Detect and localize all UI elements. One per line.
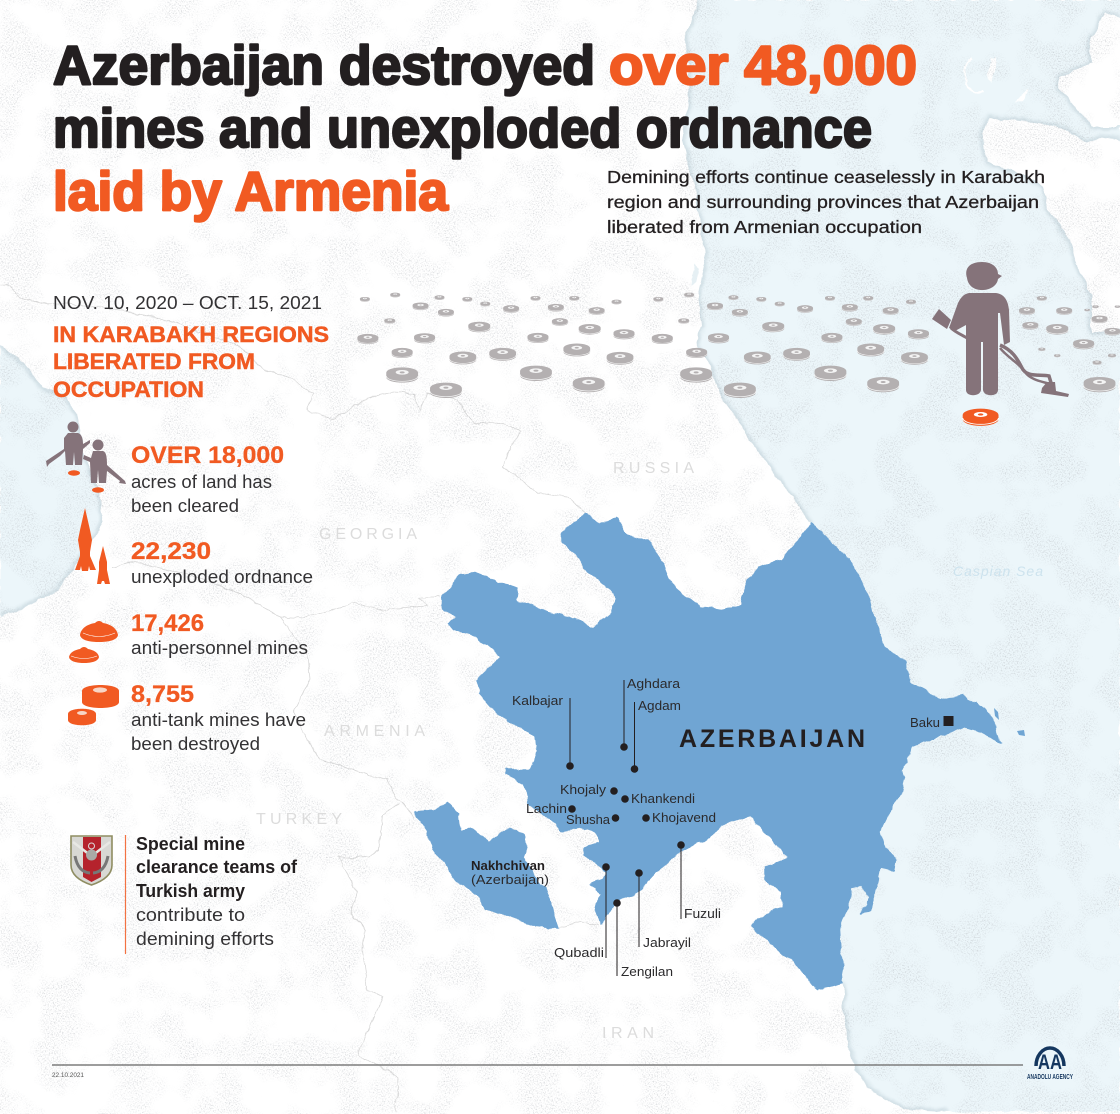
logo: Anadolu Agency xyxy=(1027,1048,1073,1081)
date range: NOV. 10, 2020 – OCT. 15, 2021 xyxy=(53,293,322,313)
country label: Georgia: GEORGIA xyxy=(319,526,417,543)
stat: land cleared: OVER 18,000 xyxy=(131,442,284,469)
stat: anti-personnel mines: anti-personnel mines xyxy=(131,638,308,658)
map label: Nakhchivan: (Azerbaijan) xyxy=(471,872,549,887)
city marker: Zengilan xyxy=(613,899,673,979)
city marker: Aghdara: Aghdara xyxy=(627,676,681,691)
title: laid by Armenia xyxy=(53,160,448,222)
date stamp: 22.10.2021 xyxy=(52,1072,84,1079)
city marker: Jabrayil: Jabrayil xyxy=(643,935,691,950)
map label: Nakhchivan xyxy=(471,858,549,887)
country label: Turkey: TURKEY xyxy=(256,811,342,828)
city marker: Khojavend: Khojavend xyxy=(652,810,716,825)
city marker: Agdam: Agdam xyxy=(638,698,681,713)
stat: unexploded ordnance: unexploded ordnance xyxy=(131,567,313,587)
section heading: OCCUPATION xyxy=(53,377,204,402)
text block: Turkish mine clearance teams: Turkish army xyxy=(136,881,245,901)
stat: anti-tank mines: anti-tank mines have xyxy=(131,710,306,730)
sea label: Caspian Sea: Caspian Sea xyxy=(953,563,1043,579)
icon: deminer with metal detector xyxy=(932,262,1069,397)
stat: land cleared xyxy=(131,442,284,516)
stat: unexploded ordnance xyxy=(131,538,313,587)
city marker: Shusha: Shusha xyxy=(566,812,611,827)
stat: anti-tank mines: 8,755 xyxy=(131,681,194,708)
map label: Nakhchivan: Nakhchivan xyxy=(471,858,545,873)
title: over 48,000 xyxy=(609,34,917,96)
icon: two deminers xyxy=(46,422,126,493)
icon: orange mine under detector xyxy=(963,409,999,426)
city marker: Fuzuli: Fuzuli xyxy=(684,906,721,921)
text block: Turkish mine clearance teams: Special mine xyxy=(136,834,245,854)
stat: anti-personnel mines: 17,426 xyxy=(131,610,204,637)
city marker: Zengilan: Zengilan xyxy=(621,964,673,979)
city marker: Kalbajar xyxy=(512,693,574,770)
text block: Turkish mine clearance teams: demining efforts xyxy=(136,929,274,949)
city marker: Lachin: Lachin xyxy=(526,801,567,816)
stat: unexploded ordnance: 22,230 xyxy=(131,538,211,565)
footer rule xyxy=(52,1064,1023,1066)
icon: anti-personnel mines xyxy=(69,621,118,663)
divider: orange rule xyxy=(124,835,126,954)
country label: Armenia: ARMENIA xyxy=(324,723,425,740)
city marker: Jabrayil xyxy=(635,869,691,950)
stat: land cleared: acres of land has xyxy=(131,472,272,492)
city marker: Kalbajar: Kalbajar xyxy=(512,693,564,708)
logo: Anadolu Agency: AA xyxy=(1038,1051,1062,1074)
logo: Anadolu Agency: ANADOLU AGENCY xyxy=(1027,1074,1073,1081)
icon: anti-tank mines xyxy=(68,685,119,725)
stat: anti-tank mines: been destroyed xyxy=(131,734,260,754)
title: mines and unexploded ordnance xyxy=(53,97,872,159)
stat: land cleared: been cleared xyxy=(131,496,239,516)
section heading xyxy=(53,322,329,402)
city marker: Khankendi: Khankendi xyxy=(631,791,695,806)
subtitle: Demining efforts continue ceaselessly in Karabakh xyxy=(607,167,1045,187)
city marker: Fuzuli xyxy=(677,841,721,921)
subtitle xyxy=(607,167,1045,237)
stat: anti-tank mines xyxy=(131,681,306,754)
text block: Turkish mine clearance teams: contribute to xyxy=(136,905,245,925)
city marker: Aghdara xyxy=(620,676,681,751)
map: Nakhchivan exclave xyxy=(415,803,558,928)
map: country borders xyxy=(0,285,598,1113)
title: Azerbaijan destroyed xyxy=(53,34,595,96)
city marker: Qubadli xyxy=(554,863,610,960)
icon: rockets xyxy=(75,508,110,584)
field of grey mines xyxy=(357,293,1120,398)
city marker: Baku capital xyxy=(910,715,954,730)
map label: Azerbaijan: AZERBAIJAN xyxy=(679,725,865,753)
subtitle: region and surrounding provinces that Azerbaijan xyxy=(607,192,1039,212)
stat: anti-personnel mines xyxy=(131,610,308,658)
map: Azerbaijan main territory xyxy=(442,513,1000,990)
icon: Turkish army emblem xyxy=(71,836,112,885)
city marker: Khojaly: Khojaly xyxy=(560,782,607,797)
city marker: Qubadli: Qubadli xyxy=(554,945,604,960)
country label: Iran: IRAN xyxy=(602,1025,654,1042)
title xyxy=(53,34,917,222)
city marker: Agdam xyxy=(631,698,681,773)
map: Absheron islands xyxy=(994,708,1025,736)
text block: Turkish mine clearance teams xyxy=(136,834,298,949)
section heading: IN KARABAKH REGIONS xyxy=(53,322,329,347)
subtitle: liberated from Armenian occupation xyxy=(607,217,922,237)
city marker: Baku capital: Baku xyxy=(910,715,940,730)
text block: Turkish mine clearance teams: clearance teams of xyxy=(136,857,298,877)
country label: Russia: RUSSIA xyxy=(613,460,694,477)
section heading: LIBERATED FROM xyxy=(53,349,255,374)
